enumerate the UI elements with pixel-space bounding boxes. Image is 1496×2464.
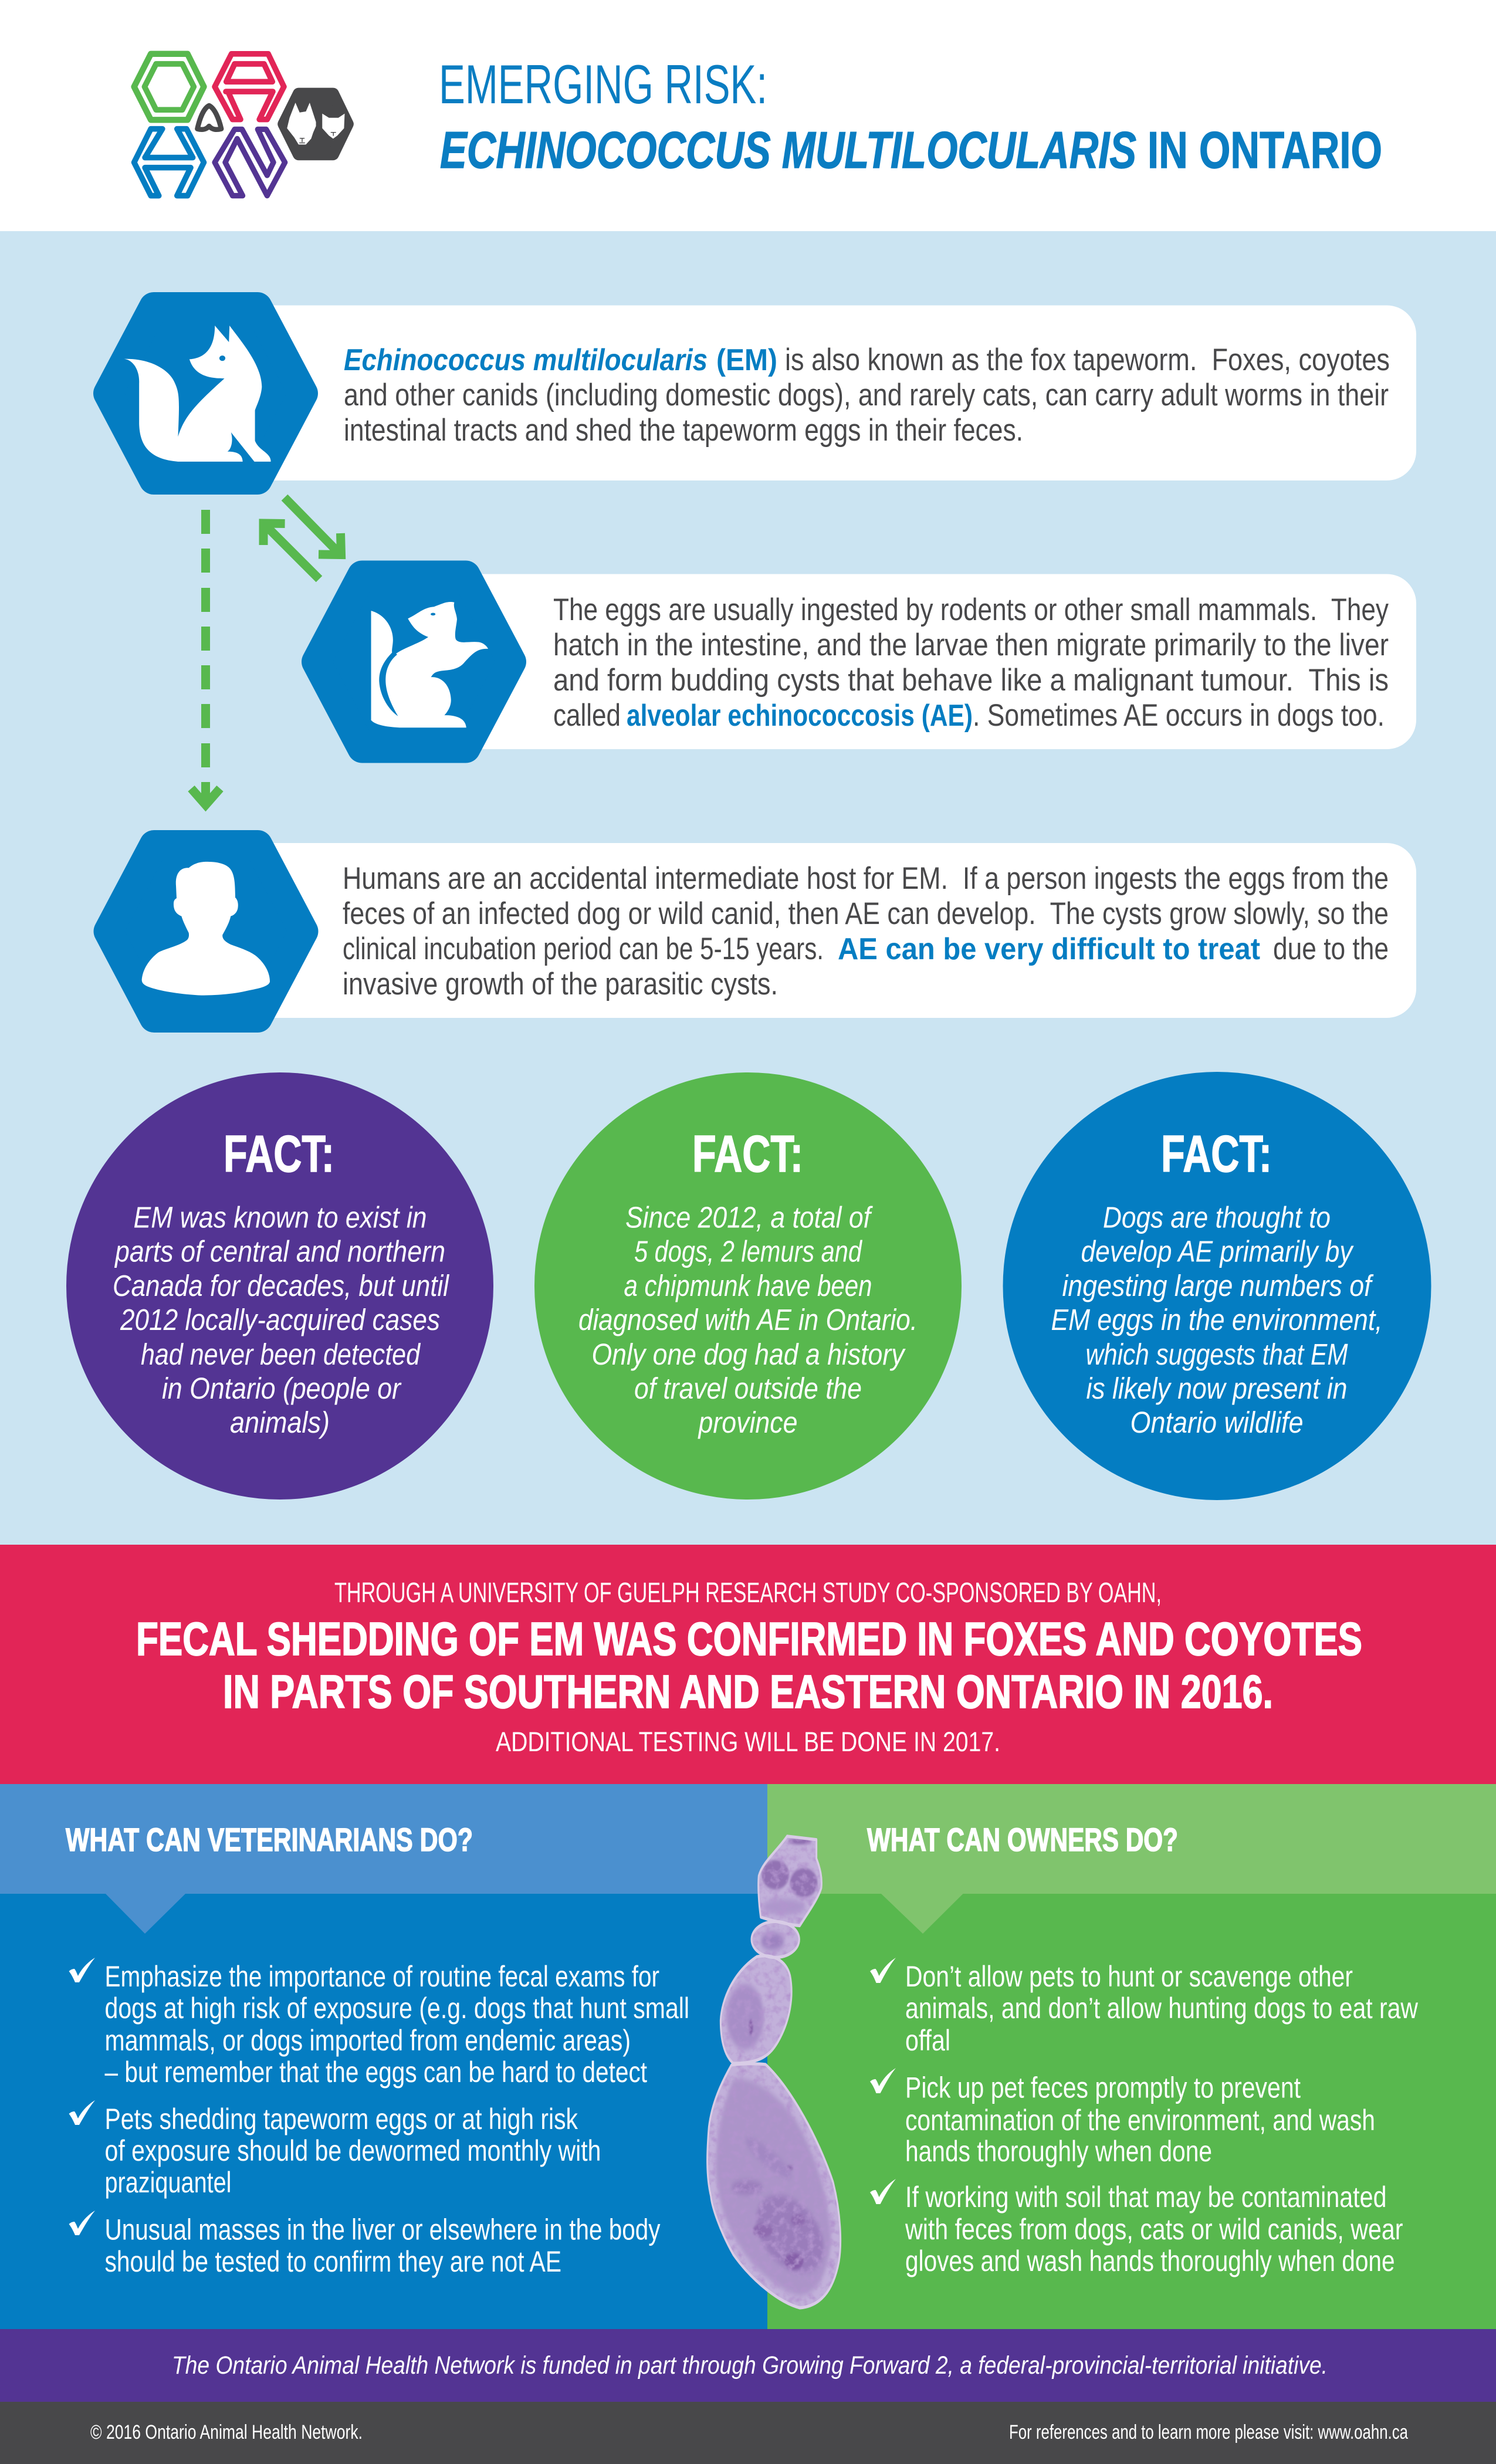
panel: what can owners do [767,1784,1496,2329]
fact circle: blue: Dogs are thought to [1103,1200,1331,1234]
card: fox [108,305,1416,480]
heading: owners: WHAT CAN OWNERS DO? [867,1821,1178,1858]
banner: research study [0,1545,1496,1784]
text: humans as hosts: clinical incubation period can be 5-15 years. [343,932,824,966]
text: what is EM: Echinococcus multilocularis [344,343,708,377]
fact circle: green [534,1072,962,1500]
icon: person hexagon [108,845,304,1018]
title: EMERGING RISK: [439,53,767,115]
fact circle: green: Since 2012, a total of [625,1200,873,1234]
fact circle: green: a chipmunk have been [624,1269,872,1302]
icon: fox hexagon [108,307,303,480]
fact circle: green: province [698,1406,798,1439]
fact circle: purple: animals) [230,1406,330,1439]
list: owner advice: hands thoroughly when done [905,2135,1212,2168]
text: what is EM [344,343,1390,448]
fact circle: blue: develop AE primarily by [1081,1234,1355,1268]
icon: squirrel hexagon [316,575,512,749]
fact circle: green: Only one dog had a history [591,1338,906,1371]
fact circle: purple: FACT: [224,1125,334,1183]
text: what is EM: is also known as the fox tapeworm. Foxes, coyotes [785,343,1390,377]
text: what is EM: (EM) [716,343,777,377]
text: eggs in rodents: alveolar echinococcosis (AE) [627,699,973,733]
banner: research study: ADDITIONAL TESTING WILL BE DONE IN 2017. [496,1726,1000,1757]
list: owner advice: with feces from dogs, cats or wild canids, wear [905,2213,1403,2246]
list: veterinarian advice: – but remember that the eggs can be hard to detect [104,2056,647,2089]
fact circle: purple: 2012 locally-acquired cases [120,1303,440,1336]
card: rodent [316,574,1416,749]
list: veterinarian advice: praziquantel [104,2166,231,2199]
list: veterinarian advice: Unusual masses in the liver or elsewhere in the body [104,2213,661,2246]
text: eggs in rodents: called [553,698,621,733]
fact circle: blue: Ontario wildlife [1130,1406,1304,1439]
fact circle: blue: is likely now present in [1087,1372,1347,1405]
fact circle: green: diagnosed with AE in Ontario. [578,1303,918,1336]
list: veterinarian advice [69,1958,689,2278]
fact circle: green: of travel outside the [634,1372,862,1405]
lifecycle panel background [0,231,1496,1545]
fact circle: purple: in Ontario (people or [162,1372,402,1405]
title [439,53,1382,179]
list: owner advice: Pick up pet feces promptly to prevent [905,2071,1301,2104]
list: owner advice: gloves and wash hands thoroughly when done [905,2245,1395,2277]
list: veterinarian advice: mammals, or dogs imported from endemic areas) [104,2024,631,2057]
illustration: tapeworm [708,1836,841,2308]
text: eggs in rodents: . Sometimes AE occurs in dogs too. [973,698,1385,733]
funding strip [0,2329,1496,2402]
footer [0,2402,1496,2464]
fact circle: green: FACT: [692,1125,803,1183]
fact circle: blue: EM eggs in the environment, [1051,1303,1382,1336]
arrow: dashed fox to human [191,510,220,805]
fact circle: blue: ingesting large numbers of [1062,1269,1374,1302]
text: humans as hosts: invasive growth of the parasitic cysts. [343,967,778,1001]
list: veterinarian advice: Emphasize the importance of routine fecal exams for [104,1960,659,1993]
logo: OAHN hexagons [134,54,348,196]
list: veterinarian advice: should be tested to confirm they are not AE [104,2245,561,2278]
fact circle: purple [66,1072,493,1500]
list: owner advice: contamination of the environment, and wash [905,2104,1375,2137]
arrows: fox and rodent cycle [263,497,341,579]
list: veterinarian advice: of exposure should be dewormed monthly with [104,2134,601,2167]
fact circle: blue [1003,1072,1431,1500]
fact circle: purple: parts of central and northern [114,1234,445,1268]
footer: © 2016 Ontario Animal Health Network. [90,2421,363,2443]
list: owner advice: Don’t allow pets to hunt or scavenge other [905,1960,1353,1993]
fact circle: blue: FACT: [1161,1125,1272,1183]
fact circle: green: 5 dogs, 2 lemurs and [634,1234,862,1268]
list: owner advice [870,1958,1419,2277]
fact circle: blue: which suggests that EM [1085,1338,1348,1371]
title: ECHINOCOCCUS MULTILOCULARIS [440,121,1136,179]
title: IN ONTARIO [1148,121,1382,179]
fact circle: purple: Canada for decades, but until [113,1269,449,1302]
fact circle: purple: EM was known to exist in [134,1200,427,1234]
list: veterinarian advice: dogs at high risk of exposure (e.g. dogs that hunt small [104,1992,689,2025]
text: humans as hosts: AE can be very difficult to treat [838,932,1260,966]
text: what is EM: intestinal tracts and shed the tapeworm eggs in their feces. [344,413,1023,448]
text: eggs in rodents: hatch in the intestine, and the larvae then migrate primarily to the liver [553,628,1389,662]
heading: veterinarians: WHAT CAN VETERINARIANS DO? [66,1821,473,1858]
list: veterinarian advice: Pets shedding tapeworm eggs or at high risk [104,2103,578,2135]
text: eggs in rodents [553,593,1389,733]
panel: what can veterinarians do [0,1784,767,2329]
funding strip: The Ontario Animal Health Network is funded in part through Growing Forward 2, a federal-provincial-territorial initiative. [172,2351,1328,2380]
list: owner advice: offal [905,2024,950,2057]
text: humans as hosts: due to the [1273,932,1389,966]
fact circle: purple: had never been detected [141,1338,421,1371]
header panel [0,0,1496,231]
banner: research study: THROUGH A UNIVERSITY OF GUELPH RESEARCH STUDY CO-SPONSORED BY OAHN, [334,1578,1162,1609]
text: eggs in rodents: and form budding cysts that behave like a malignant tumour. This is [553,663,1389,698]
list: owner advice: If working with soil that may be contaminated [905,2181,1387,2213]
card: human [108,843,1416,1018]
text: humans as hosts [343,861,1389,1001]
